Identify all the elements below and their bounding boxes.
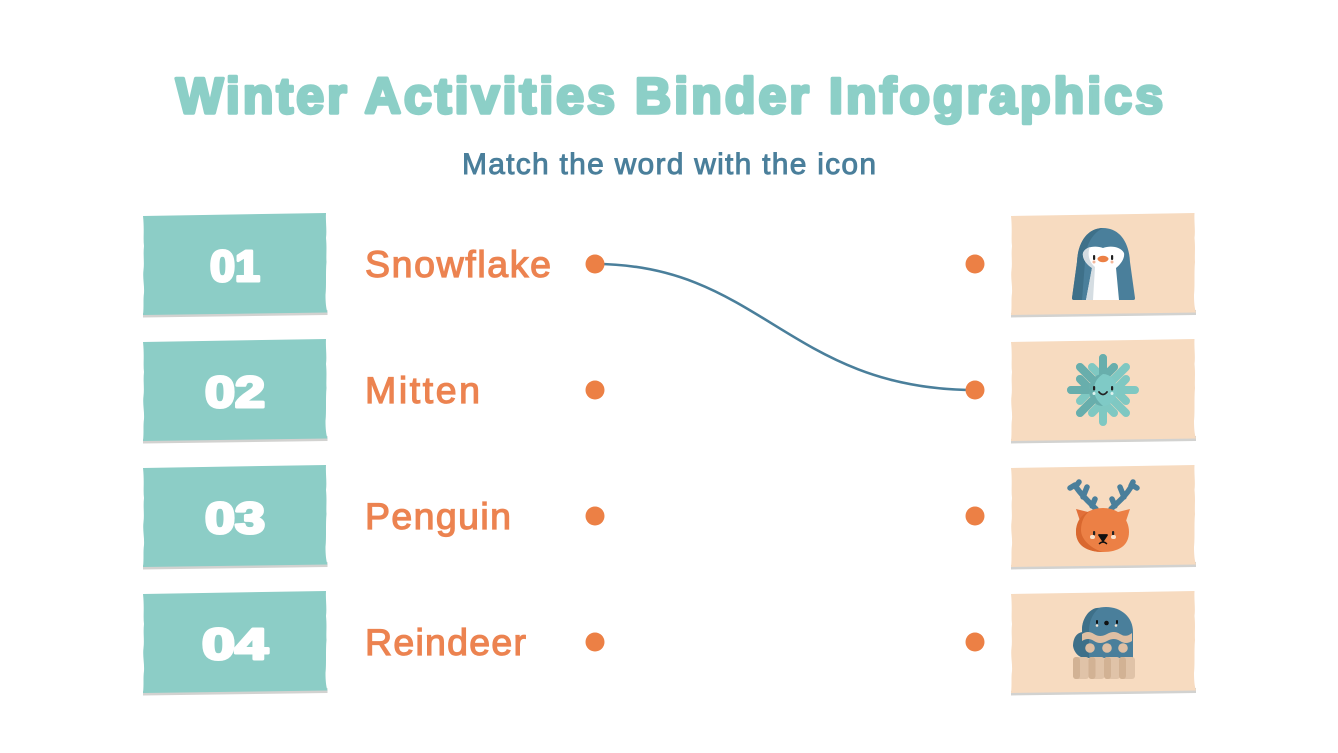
word: Mitten: Mitten xyxy=(365,369,480,411)
title: Winter Activities Binder Infographics xyxy=(176,68,1163,124)
row 03 number tape xyxy=(143,465,328,570)
number 01: 01 xyxy=(210,242,260,291)
row 04 number tape xyxy=(143,591,328,696)
left dot 2 xyxy=(586,380,604,400)
icon tape 4 xyxy=(1011,688,1196,696)
icon: penguin xyxy=(1072,228,1135,300)
left dot 4 xyxy=(586,632,604,652)
icon tape 2 xyxy=(1011,436,1196,444)
number 03: 03 xyxy=(205,494,265,543)
right dot 2 xyxy=(966,380,984,400)
row 02 number tape xyxy=(143,339,328,444)
right dot 1 xyxy=(966,254,984,274)
row 01 number tape xyxy=(143,213,328,318)
icon: snowflake xyxy=(1071,358,1135,422)
number 04: 04 xyxy=(202,620,269,669)
left dot 1 xyxy=(586,254,604,274)
icon tape 1 xyxy=(1011,310,1196,318)
subtitle: Match the word with the icon xyxy=(462,148,876,181)
word: Penguin: Penguin xyxy=(365,495,511,537)
right dot 3 xyxy=(966,506,984,526)
icon: mitten xyxy=(1073,607,1135,679)
word: Reindeer: Reindeer xyxy=(365,621,526,663)
left dot 3 xyxy=(586,506,604,526)
word: Snowflake: Snowflake xyxy=(365,243,551,285)
connector line: Snowflake to snowflake icon xyxy=(595,264,975,390)
number 02: 02 xyxy=(205,368,265,417)
right dot 4 xyxy=(966,632,984,652)
icon: reindeer xyxy=(1070,482,1137,552)
icon tape 3 xyxy=(1011,562,1196,570)
